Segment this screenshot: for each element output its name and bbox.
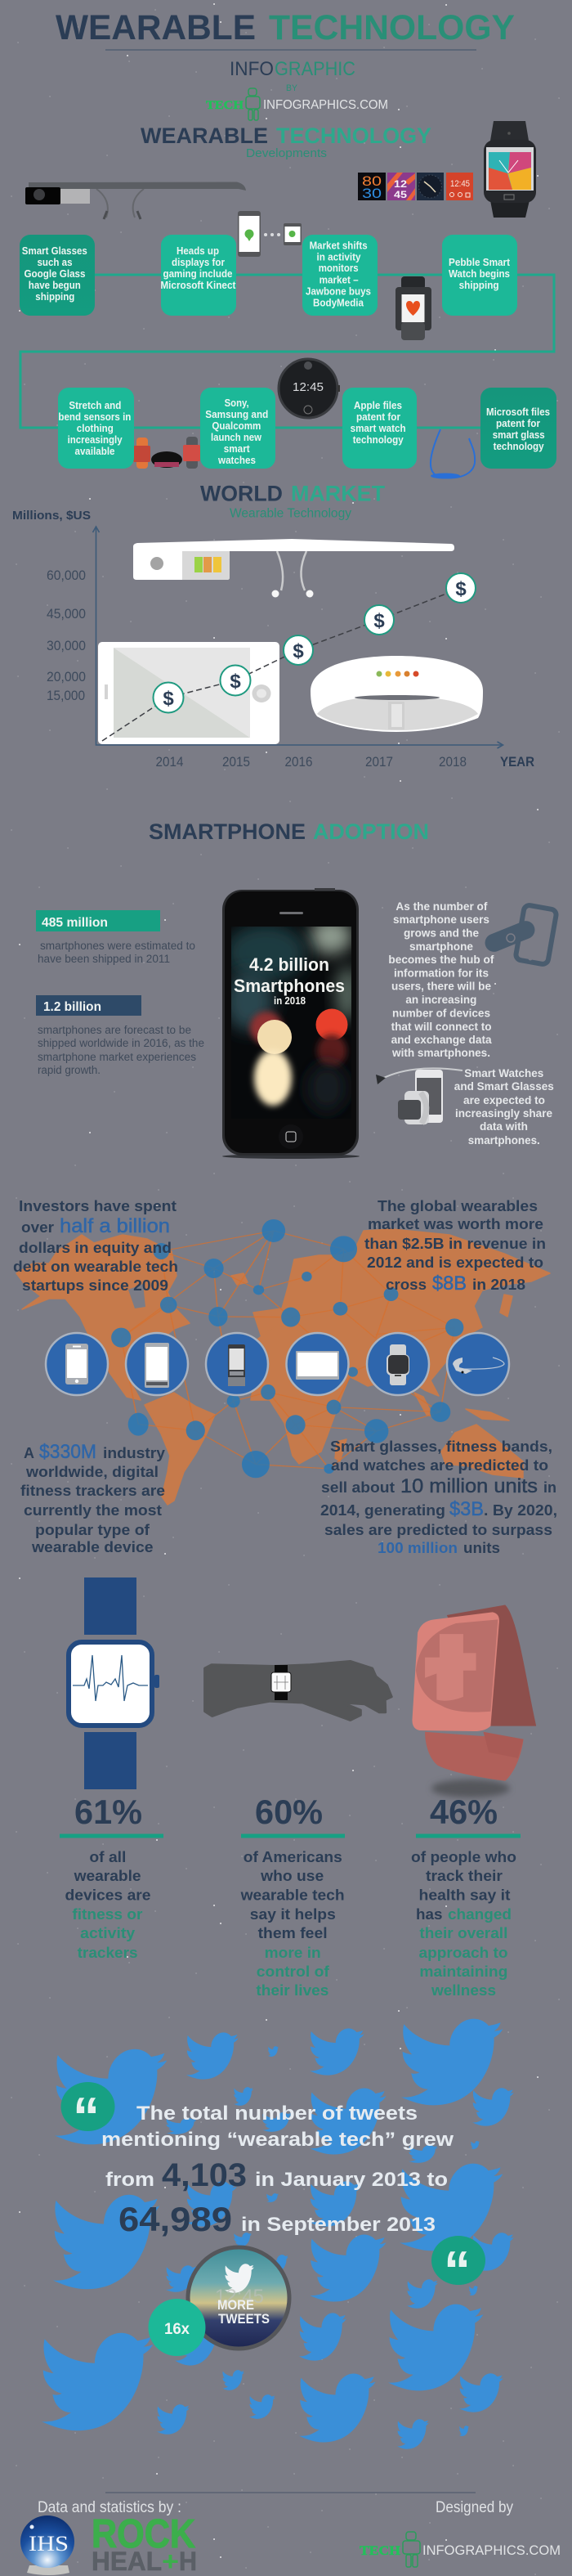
x axis years [155, 755, 534, 770]
stat: 485 million [36, 910, 195, 965]
heading: world market [200, 482, 385, 521]
text: smart watches and glasses: and Smart Glasses [454, 1079, 554, 1093]
text: smartphone hub: information for its [394, 967, 489, 980]
stat: 485 million: have been shipped in 2011 [38, 953, 170, 965]
text: digital fitness trackers: A [24, 1444, 34, 1461]
milestone: smart glasses: have begun [29, 280, 81, 291]
text: smartphone hub: As the number of [395, 900, 488, 913]
milestone: heads up displays [160, 235, 236, 316]
text: sales prediction: $3B [449, 1498, 484, 1520]
text: digital fitness trackers: fitness trackers are [20, 1482, 165, 1499]
milestone: microsoft patent: smart glass [493, 429, 545, 441]
tweet statistic text: from [105, 2169, 154, 2191]
stat: 60 percent: say it helps [250, 1906, 336, 1923]
milestone: heads up displays: displays for [172, 257, 225, 268]
x axis years: 2018 [439, 755, 467, 770]
milestone: sony samsung qualcomm [200, 388, 275, 469]
stat: 46 percent: track their [426, 1868, 503, 1884]
logo: rock health: + [162, 2547, 179, 2576]
milestone: market shifts: market – [320, 275, 359, 286]
illustration: white tablet [98, 642, 279, 744]
milestone: sony samsung qualcomm: Sony, [225, 397, 249, 409]
logo: techinfographics footer [360, 2532, 561, 2567]
text: smartphone hub [388, 900, 494, 1059]
tweet statistic text: in January 2013 to [255, 2169, 448, 2191]
logo: techinfographics: INFOGRAPHICS.COM [263, 98, 388, 112]
milestone: stretch sensors: Stretch and [69, 400, 121, 411]
illustration: medical wristband [412, 1604, 536, 1797]
text: smartphone hub: with smartphones. [391, 1046, 490, 1059]
text: sales prediction: 2014, generating [320, 1501, 445, 1519]
milestone: apple patent: Apple files [354, 400, 402, 411]
logo: techinfographics: TECH [206, 99, 244, 112]
stat: 46 percent: their overall [419, 1925, 507, 1941]
stat: 1.2 billion [36, 995, 204, 1076]
text: investors: startups since 2009 [22, 1277, 168, 1294]
quote badge bottom [431, 2236, 485, 2300]
text: sales prediction: and watches are predicted to [331, 1456, 548, 1474]
stat: 46 percent: health say it [418, 1887, 510, 1904]
subtitle: infographic [230, 58, 355, 80]
stat: 46 percent: maintaining [419, 1963, 507, 1980]
quote badge top: “ [73, 2086, 100, 2147]
y axis ticks: 15,000 [47, 689, 85, 703]
logo: rock health: H [179, 2547, 197, 2576]
illustration: smartphone with 4.2 billion stat: in 2018 [274, 994, 306, 1007]
stat: 1.2 billion: shipped worldwide in 2016, as the [38, 1037, 204, 1049]
footer: data credit: Data and statistics by : [38, 2499, 181, 2516]
logo: rock health: HEAL [92, 2547, 162, 2576]
icon: smartwatch faces: 45 [394, 189, 407, 200]
text: sales prediction: units [463, 1539, 500, 1556]
dollar markers: $ [230, 671, 241, 693]
text: investors: Investors have spent [19, 1197, 177, 1214]
tweet statistic text: 4,103 [162, 2157, 247, 2193]
milestone: heads up displays: Microsoft Kinect [160, 280, 236, 291]
stat: 46 percent: approach to [418, 1945, 508, 1961]
icon: smartwatch faces: 80 [362, 173, 382, 189]
y axis ticks: 20,000 [47, 670, 86, 684]
stat: 1.2 billion: rapid growth. [38, 1064, 101, 1076]
illustration: smartwatch more tweets: 12:45 [215, 2286, 264, 2308]
stat: 1.2 billion: smartphones are forecast to be [38, 1024, 191, 1036]
text: global market: cross [386, 1276, 427, 1293]
milestone: microsoft patent: technology [494, 441, 544, 452]
illustration: smartwatch more tweets [188, 2247, 289, 2349]
text: digital fitness trackers: industry [103, 1444, 166, 1461]
heading: smartphone adoption [149, 819, 429, 844]
icon: blue glass outline [431, 429, 475, 479]
milestone: heads up displays: gaming include [163, 268, 233, 280]
title: WEARABLE [56, 8, 256, 47]
text: smart watches and glasses: Smart Watches [464, 1066, 544, 1079]
logo: techinfographics [206, 88, 388, 120]
logo: ihs: IHS [29, 2532, 69, 2556]
stat: 485 million: 485 million [42, 916, 108, 930]
stat: 1.2 billion: smartphone market experiences [38, 1051, 196, 1063]
stat: 46 percent: has [416, 1906, 443, 1923]
heading: wearable technology developments: Developments [246, 146, 327, 160]
milestone: smart glasses: Smart Glasses [22, 245, 87, 257]
text: investors: over [21, 1218, 54, 1236]
stat: 60 percent: of Americans [244, 1849, 342, 1865]
milestone: microsoft patent: patent for [496, 418, 540, 429]
stat: 61 percent [60, 1793, 163, 1961]
milestone: microsoft patent [480, 388, 556, 469]
milestone: stretch sensors: increasingly [68, 434, 123, 446]
chart: world market growth [12, 509, 534, 770]
milestone: smart glasses [20, 235, 95, 316]
icon: pebble watch [395, 276, 431, 340]
x axis years: 2017 [365, 755, 393, 770]
text: sales prediction: sell about [321, 1479, 395, 1496]
illustration: smartphone with 4.2 billion stat [222, 888, 360, 1159]
illustration: smartwatch more tweets: MORE [217, 2297, 254, 2313]
heading: world market: Wearable Technology [230, 507, 351, 521]
stat: 60 percent: wearable tech [240, 1887, 345, 1904]
x axis years: 2015 [222, 755, 250, 770]
milestone: heads up displays: Heads up [177, 245, 219, 257]
text: investors: dollars in equity and [19, 1239, 172, 1256]
stat: 61 percent: wearable [74, 1868, 141, 1884]
text: smartphone hub: smartphone [409, 940, 473, 953]
text: investors: debt on wearable tech [13, 1258, 178, 1275]
milestone: pebble [442, 235, 517, 316]
y axis ticks: 60,000 [47, 568, 86, 583]
text: sales prediction: sales are predicted to surpass [324, 1521, 552, 1538]
logo: rock health: ROCK [92, 2512, 195, 2556]
milestone: market shifts: Market shifts [310, 240, 368, 252]
milestone: apple patent: smart watch [351, 423, 406, 434]
icon: glass [453, 1358, 504, 1374]
milestone: smart glasses: such as [38, 257, 73, 268]
heading: wearable technology developments [141, 123, 431, 160]
text: digital fitness trackers: wearable device [31, 1538, 154, 1555]
text: sales prediction: 100 million [378, 1539, 458, 1556]
dollar markers: $ [455, 578, 467, 600]
milestone: market shifts: monitors [319, 263, 359, 274]
dollar markers: $ [163, 688, 174, 710]
text: global market: The global wearables [378, 1197, 538, 1214]
stat: 46 percent: 46% [430, 1793, 498, 1831]
icon: smartwatch faces: 12:45 [450, 179, 470, 189]
text: smartphone hub: becomes the hub of [388, 953, 494, 966]
icon: watch [387, 1344, 409, 1385]
stat: 485 million: smartphones were estimated to [40, 940, 195, 952]
text: smartphone hub: users, there will be [391, 980, 491, 993]
text: smart watches and glasses: data with [480, 1120, 528, 1133]
heading: world market: MARKET [291, 482, 385, 506]
milestone: stretch sensors: clothing [77, 423, 114, 434]
milestone: stretch sensors: available [75, 446, 115, 457]
milestone: sony samsung qualcomm: Samsung and [205, 409, 268, 420]
y axis ticks: 30,000 [47, 639, 86, 653]
y axis ticks [47, 568, 86, 703]
text: investors [13, 1197, 178, 1294]
title: TECHNOLOGY [269, 8, 515, 47]
illustration: white glass [133, 539, 454, 597]
stat: 1.2 billion: 1.2 billion [43, 1000, 101, 1014]
milestone: apple patent: technology [353, 434, 404, 446]
heading: wearable technology developments: WEARABLE [141, 123, 268, 148]
text: global market [364, 1197, 546, 1295]
text: investors: half a billion [60, 1215, 170, 1237]
tweet statistic text: mentioning “wearable tech” grew [101, 2129, 454, 2151]
milestone: pebble: Watch begins [449, 268, 510, 280]
x axis years: YEAR [500, 755, 534, 770]
icon: round smartwatch: 12:45 [293, 380, 324, 394]
logo: techinfographics footer: TECH [360, 2544, 401, 2558]
stat: 46 percent [411, 1793, 521, 1999]
text: smartphone hub: number of devices [392, 1006, 490, 1019]
text: global market: in 2018 [472, 1276, 525, 1293]
text: smart watches and glasses [454, 1066, 554, 1147]
milestone: sony samsung qualcomm: launch new [211, 432, 261, 443]
milestone: sony samsung qualcomm: watches [217, 455, 256, 466]
x axis years: 2014 [155, 755, 183, 770]
dollar markers [154, 573, 476, 713]
milestone: sony samsung qualcomm: smart [224, 443, 250, 455]
icon: three fitness bands [133, 437, 200, 469]
stat: 61 percent: fitness or [72, 1906, 142, 1923]
icon: slider phone [228, 1344, 245, 1386]
stat: 60 percent [240, 1793, 345, 1999]
milestone: apple patent [342, 388, 417, 469]
text: global market: than $2.5B in revenue in [364, 1235, 546, 1252]
text: smartphone hub: an increasing [405, 993, 476, 1006]
icon: phone with band [482, 904, 557, 965]
text: digital fitness trackers: $330M [39, 1441, 96, 1463]
milestone: sony samsung qualcomm: Qualcomm [212, 420, 261, 432]
stat: 60 percent: their lives [256, 1982, 328, 1999]
icon: google glass [25, 182, 246, 219]
subtitle: infographic: INFO [230, 58, 274, 80]
icon: smartwatch faces: 30 [362, 186, 382, 201]
heading: smartphone adoption: ADOPTION [313, 819, 429, 844]
text: smartphone hub: smartphone users [393, 913, 489, 926]
subtitle: infographic: GRAPHIC [275, 58, 355, 80]
text: global market: market was worth more [368, 1215, 543, 1232]
milestone: stretch sensors: bend sensors in [58, 411, 131, 423]
milestone: market shifts [302, 235, 378, 316]
stat: 60 percent: control of [257, 1963, 330, 1980]
milestone: apple patent: patent for [356, 411, 400, 423]
text: smartphone hub: and exchange data [391, 1033, 492, 1046]
text: smart watches and glasses: smartphones. [468, 1133, 540, 1147]
text: smart watches and glasses: are expected to [463, 1093, 545, 1106]
icon: smartwatch faces: 12 [394, 178, 407, 190]
icon: phones with heads up display [238, 211, 302, 257]
dollar markers: $ [373, 610, 385, 632]
stat: 46 percent: changed [448, 1906, 512, 1923]
stat: 61 percent: of all [89, 1849, 126, 1865]
tweet statistic text: 64,989 [118, 2200, 232, 2238]
logo: ihs [20, 2515, 74, 2575]
icon: phone [65, 1344, 88, 1384]
heading: smartphone adoption: SMARTPHONE [149, 819, 306, 844]
stat: 60 percent: who use [260, 1868, 324, 1884]
text: digital fitness trackers: popular type of [35, 1521, 150, 1538]
title [56, 8, 515, 47]
badge: 16x [149, 2299, 206, 2356]
icon: tablet [296, 1351, 339, 1380]
stat: 61 percent: activity [80, 1925, 135, 1941]
world map network [16, 1219, 550, 1505]
heading: world market: WORLD [200, 482, 283, 506]
stat: 46 percent: of people who [411, 1849, 516, 1865]
text: global market: $8B [432, 1272, 467, 1295]
twitter bird field [42, 2019, 514, 2449]
tweet statistic text: The total number of tweets [136, 2103, 418, 2125]
milestone: market shifts: Jawbone buys [306, 286, 371, 298]
text: sales prediction: 10 million units [400, 1475, 538, 1497]
x axis years: 2016 [284, 755, 312, 770]
footer: design credit: Designed by [436, 2499, 513, 2516]
stat: 60 percent: more in [265, 1945, 321, 1961]
stat: 61 percent: devices are [65, 1887, 150, 1904]
dollar markers: $ [293, 640, 304, 662]
stat: 61 percent: trackers [78, 1945, 138, 1961]
text: smart watches and glasses: increasingly share [455, 1106, 552, 1120]
y axis label: Millions, $US [12, 509, 91, 523]
milestone: pebble: Pebble Smart [449, 257, 511, 268]
text: smartphone hub: that will connect to [391, 1020, 492, 1033]
y axis ticks: 45,000 [47, 607, 86, 622]
text: smartphone hub: grows and the [404, 926, 479, 939]
icon: samsung smart watch [484, 121, 536, 218]
illustration: heart rate watch [69, 1577, 159, 1789]
stat: 46 percent: wellness [431, 1982, 496, 1999]
text: sales prediction: Smart glasses, fitness bands, [330, 1438, 552, 1455]
icon: round smartwatch [279, 359, 340, 418]
text: global market: 2012 and is expected to [367, 1254, 543, 1271]
by label: BY [286, 83, 298, 93]
timeline connector [20, 275, 554, 428]
tweet statistic text [101, 2103, 454, 2238]
illustration: arm with watch [205, 1661, 391, 1720]
stat: 60 percent: them feel [258, 1925, 328, 1941]
logo: rock health [92, 2512, 197, 2576]
badge: 16x: 16x [164, 2321, 190, 2338]
milestone: microsoft patent: Microsoft files [486, 406, 550, 418]
illustration: smartphone with 4.2 billion stat: 4.2 billion [249, 954, 329, 975]
milestone: smart glasses: shipping [35, 291, 74, 303]
text: digital fitness trackers: worldwide, digital [25, 1463, 159, 1480]
illustration: smartwatch more tweets: TWEETS [218, 2311, 270, 2327]
milestone: smart glasses: Google Glass [25, 268, 86, 280]
device icon row [46, 1333, 509, 1395]
text: sales prediction: in [543, 1479, 556, 1496]
trend line [102, 588, 461, 741]
tweet statistic text: in September 2013 [241, 2214, 436, 2236]
heading: wearable technology developments: TECHNOLOGY [276, 123, 431, 148]
icon: smartwatch faces [358, 173, 473, 201]
quote badge top [60, 2082, 114, 2147]
illustration: white fitness band [311, 656, 483, 732]
quote badge bottom: “ [444, 2240, 471, 2300]
milestone: market shifts: BodyMedia [313, 298, 364, 309]
logo: techinfographics footer: INFOGRAPHICS.COM [422, 2542, 561, 2558]
milestone: pebble: shipping [459, 280, 499, 291]
stat: 60 percent: 60% [255, 1793, 323, 1831]
text: sales prediction [320, 1438, 557, 1556]
illustration: smartphone with 4.2 billion stat: Smartphones [234, 976, 345, 996]
milestone: stretch sensors [58, 388, 134, 469]
stat: 61 percent: 61% [74, 1793, 142, 1831]
text: sales prediction: . By 2020, [484, 1501, 557, 1519]
icon: android phone [145, 1343, 169, 1388]
icon: glass, phone and watch [376, 1068, 463, 1124]
milestone: market shifts: in activity [317, 252, 361, 263]
text: digital fitness trackers: currently the most [24, 1501, 162, 1519]
text: digital fitness trackers [20, 1441, 166, 1555]
